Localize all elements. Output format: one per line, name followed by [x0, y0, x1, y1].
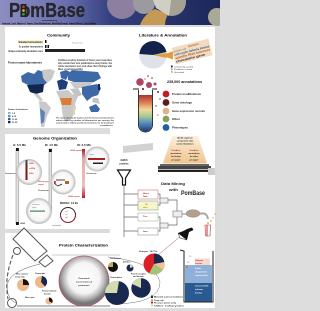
labels beside chromosomes: [5, 149, 97, 225]
icon: black lamp: [178, 228, 194, 240]
zoom circle: chromosome I: tRNA: [29, 172, 34, 175]
pie: transcripts: Transcripts: [35, 272, 45, 275]
labels: chromosome sizes: M: 4.5 Mb: [45, 143, 58, 147]
pie: unique: [139, 251, 164, 275]
legend: number of laboratories: 21-35: [12, 122, 18, 124]
labels beside chromosomes: rDNA: [20, 222, 25, 225]
chart: beaker: 4%: [187, 262, 190, 264]
pie: mass spectrometry: Mass spectro: [16, 272, 29, 276]
map caption: The map is showing the location of all the fission yeast laboratories: [56, 116, 115, 120]
workflow boxes: Tools: [143, 196, 148, 198]
annotation count: 235,000 annotations: [167, 80, 202, 84]
pie legend: PomBase curated: [174, 68, 192, 71]
workflow boxes: [138, 190, 182, 235]
labels beside chromosomes: Mating type: [38, 180, 49, 183]
book: annotations: [170, 152, 183, 155]
legend rows: [8, 40, 44, 53]
bubbles: [136, 75, 161, 116]
chromosome III: [82, 149, 85, 198]
chart: mitochondrial genome ring: atp6: [65, 216, 68, 219]
pie: small: Transmembrane: [42, 290, 57, 292]
pie: transcripts: [35, 272, 47, 288]
heading: genome organization: Genome Organization: [33, 136, 78, 140]
pie legend: [171, 66, 193, 74]
website line: www.pombase.org: [42, 20, 58, 22]
word cloud: protein cell: [173, 47, 187, 53]
labels: chromosome sizes: H: 5.5 Mb: [13, 143, 26, 147]
book: for human: [171, 156, 182, 158]
book: curated databases: [176, 142, 195, 146]
chart: beaker: characterized: [195, 270, 207, 274]
microscope arc and stage: [7, 248, 120, 308]
labels beside chromosomes: Centromere: [5, 172, 16, 175]
workflow boxes: slims: [143, 207, 148, 209]
pie: small: domain: [44, 294, 52, 296]
labels: chromosome sizes: III: 3.5 Mb: [77, 143, 91, 147]
word cloud: meiosis: [187, 42, 199, 48]
chart: beaker: Protein: [195, 267, 201, 270]
zoom circle: chromosome I: rRNA: [29, 162, 34, 165]
icon: traffic light: [20, 4, 26, 17]
pie: small: [42, 290, 57, 304]
labels beside chromosomes: region: [38, 184, 45, 186]
book: PomBase: [171, 150, 181, 152]
pictogram people: [45, 40, 85, 52]
authors line: Antonia Lock, Midori A. Harris, Kim Rutherford, Mark McDowall, Valerie Wood, Jürg Bähler: [2, 21, 97, 25]
zoom circle: lower: region: [32, 206, 36, 209]
panel: protein characterization: [7, 228, 213, 308]
legend: pie: Fungi only: [154, 300, 165, 302]
legend rows: S. pombe researchers: [19, 46, 44, 48]
legend: pie: Broad conservation: [154, 296, 184, 298]
map caption: community is widely spread and continues to be growing in: [56, 122, 115, 124]
legend: pie: Fission yeast only: [154, 301, 177, 304]
header banner: [0, 0, 226, 26]
pie: large lower left: Transcription: [110, 276, 123, 279]
pie chart: literature: [139, 41, 167, 69]
panel: data mining: with: [168, 188, 178, 192]
book: per paper: [189, 160, 199, 162]
pie: mass spectrometry: metry data: [15, 276, 26, 278]
icon: funnel top: [118, 170, 130, 185]
map caption: colour coded by number of laboratories per country, the: [56, 119, 115, 122]
legend: number of laboratories: 11-20: [12, 119, 18, 121]
side notch: [208, 168, 215, 175]
label: localization: Localization: [110, 257, 122, 260]
pie: small centre: [123, 260, 134, 272]
map caption: numbers: [100, 124, 114, 127]
community text: the community: [58, 68, 84, 71]
category: phenotypes: Phenotypes: [172, 126, 188, 130]
label: omics datasets: GWAS: [120, 159, 128, 162]
zoom circle: chromosome I: snRNA: [29, 167, 36, 170]
chart: mitochondrial genome ring: cob: [65, 214, 67, 216]
heading: community: Community: [47, 32, 71, 38]
zoom circle: chromosome III: region: [89, 154, 94, 156]
panel: community: [8, 32, 115, 127]
category: protein modifications: Protein modifications: [172, 92, 201, 96]
legend: number of laboratories: 6-10: [12, 116, 17, 118]
labels beside chromosomes: Centromere: [38, 189, 49, 192]
heading: data mining: Data Mining: [161, 182, 185, 186]
annotation categories: [163, 91, 205, 131]
pie legend: Community curated: [174, 66, 193, 68]
workflow boxes: Pfam: [143, 216, 148, 218]
pie: small centre: Deletion: [123, 260, 131, 264]
legend: pie: [151, 296, 184, 307]
pipe: [200, 214, 208, 219]
oval outline: [108, 257, 160, 304]
book: Model organism: [177, 138, 193, 140]
chart: world map of laboratories: [21, 69, 101, 127]
community text: [58, 59, 113, 71]
map caption: [56, 116, 115, 127]
workflow boxes: Mining: [143, 193, 149, 195]
category: other: Other: [172, 117, 181, 121]
workflow lines: [124, 185, 187, 237]
icon: brain-like filter: [186, 210, 200, 217]
pie: mass spectrometry: [15, 272, 29, 291]
circle: taxonomic conservation: proteomes: [78, 284, 90, 287]
chart: beaker: 8%: [186, 267, 189, 269]
community text: online annotation tool, and share their findings with: [58, 65, 113, 68]
panel: data mining: [118, 136, 216, 237]
chart: mitochondrial genome ring: mitochondrial: [52, 224, 62, 227]
community text: PomBase is built by hundreds of fission yeast researchers: [58, 59, 113, 62]
page panels background: [5, 27, 215, 308]
workflow boxes: Gene: [143, 231, 148, 233]
zoom circle: lower: centromere: [32, 203, 40, 206]
labels beside chromosomes: Centromere: [86, 172, 97, 175]
circle: taxonomic conservation: conservation of: [76, 280, 92, 284]
chart: mitochondrial genome ring: [52, 208, 76, 227]
chart: beaker: Conserved with: [195, 284, 208, 288]
grey ribbon: [123, 143, 153, 153]
workflow boxes: GO: [145, 204, 148, 206]
chart: beaker: Unknown: [195, 260, 203, 262]
category: gene ontology: Gene ontology: [172, 100, 192, 104]
book: per paper: [171, 160, 181, 162]
zoom circle: chromosome II: [50, 170, 76, 194]
label: mass spec: Mass spec: [25, 297, 35, 299]
legend: number of laboratories: [8, 108, 29, 124]
microscope body: [13, 228, 53, 267]
pie: localisation small: [108, 262, 118, 272]
pie: unique: Unique: 18.7%: [139, 251, 157, 253]
book: [158, 136, 212, 172]
connector to pie: [158, 235, 182, 255]
category: gene expression records: Gene expression records: [172, 109, 205, 113]
label: omics datasets: proteins: [119, 162, 129, 166]
chromosome I: [16, 148, 19, 225]
book: annotations: [188, 152, 201, 155]
community text: who curate their own publications using Canto, the: [58, 62, 113, 65]
chart: beaker: 1%: [189, 256, 192, 258]
word cloud: spindle RNA telomere: [175, 48, 211, 60]
pie: large lower right: [131, 272, 151, 298]
word cloud: [172, 39, 213, 64]
panel: literature and annotation: [133, 32, 213, 132]
label: fission yeast laboratories: Fission yeast laboratories: [8, 60, 42, 64]
chart: beaker: function: [195, 292, 202, 294]
pie: large lower right: and domain: [133, 276, 144, 278]
chart: mitochondrial genome ring: cox1: [65, 211, 68, 213]
legend: pie: Other eukaryotes: [154, 304, 184, 307]
labels: chromosome sizes: [13, 143, 91, 147]
word cloud: chromatin gene: [176, 52, 206, 64]
word cloud: cell cycle mitosis kinase: [174, 44, 210, 57]
panel: data mining: PomBase: [181, 191, 206, 197]
pie legend: Uncurated: [174, 71, 184, 74]
chart: beaker: unknown: [195, 289, 203, 291]
circle: taxonomic conservation: Taxonomic: [78, 278, 90, 280]
icon: popcorn output: [205, 213, 216, 236]
heading: literature: Literature & Annotation: [139, 32, 188, 38]
legend: number of laboratories: 1-5: [12, 113, 16, 115]
pie: large lower right: Protein complex: [131, 272, 147, 276]
heading: protein characterization: Protein Characterization: [59, 244, 109, 248]
legend rows: Standard annotations: [18, 41, 43, 44]
pie: large lower left: [105, 276, 129, 305]
legend key: Researchers: [72, 42, 83, 44]
zoom circle: chromosome I: [16, 159, 42, 185]
legend: number of laboratories: Number of laboratories: [8, 108, 29, 111]
chart: beaker: function: [195, 262, 202, 265]
test tube: [133, 89, 157, 132]
labels beside chromosomes: rDNA repeats: [68, 195, 80, 198]
chromosome II: [49, 149, 52, 212]
book: PomBase: [189, 150, 199, 152]
chart: beaker: [180, 250, 213, 302]
panel: genome organization: [5, 136, 110, 227]
zoom circle: lower: [26, 198, 52, 224]
chart: beaker: experimentally: [195, 274, 208, 277]
label: omics datasets: [119, 159, 129, 166]
legend rows: Unique community annotation users: [8, 50, 44, 53]
book: for other: [190, 155, 198, 158]
connector wedge: [162, 51, 173, 60]
book: comparative data: [177, 140, 194, 142]
circle: taxonomic conservation: [59, 256, 109, 306]
heading: MtDNA: MtDNA: 19 kb: [60, 201, 78, 205]
labels beside chromosomes: rDNA repeats: [70, 149, 82, 152]
